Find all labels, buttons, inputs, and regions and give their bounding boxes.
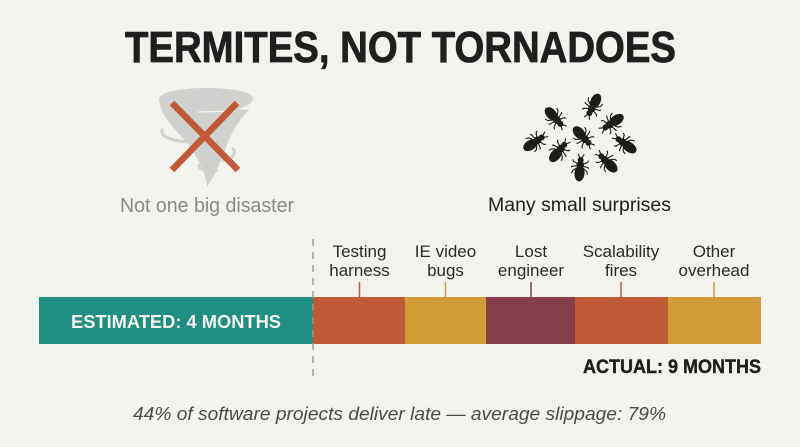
icon: red X — [172, 103, 238, 170]
label: testing harness: Testing — [333, 242, 386, 261]
label: IE video bugs: IE video — [415, 242, 476, 261]
label: other overhead: overhead — [679, 261, 749, 280]
label: testing harness — [329, 242, 390, 297]
caption: many small surprises: Many small surprises — [488, 195, 671, 216]
actual label: ACTUAL: 9 MONTHS — [583, 357, 761, 378]
label: lost engineer: engineer — [498, 261, 564, 280]
label: other overhead — [679, 242, 749, 297]
estimated label: ESTIMATED: 4 MONTHS — [71, 312, 281, 332]
actual bar segments — [313, 297, 761, 344]
icon: termites swarm — [519, 90, 641, 182]
dashed divider — [312, 239, 314, 380]
label: IE video bugs — [415, 242, 476, 297]
title: TERMITES, NOT TORNADOES — [125, 23, 676, 72]
label: testing harness: harness — [329, 261, 390, 280]
label: lost engineer: Lost — [515, 242, 547, 261]
label: lost engineer — [498, 242, 564, 297]
label: scalability fires — [583, 242, 660, 297]
label: scalability fires: Scalability — [583, 242, 660, 261]
label: IE video bugs: bugs — [427, 261, 464, 280]
caption: not one big disaster: Not one big disaster — [120, 195, 294, 217]
label: scalability fires: fires — [605, 261, 637, 280]
icon: crossed-out tornado — [159, 88, 253, 187]
label: other overhead: Other — [693, 242, 736, 261]
estimated bar — [39, 297, 313, 344]
footer statistic: 44% of software projects deliver late — average slippage: 79% — [133, 403, 666, 424]
